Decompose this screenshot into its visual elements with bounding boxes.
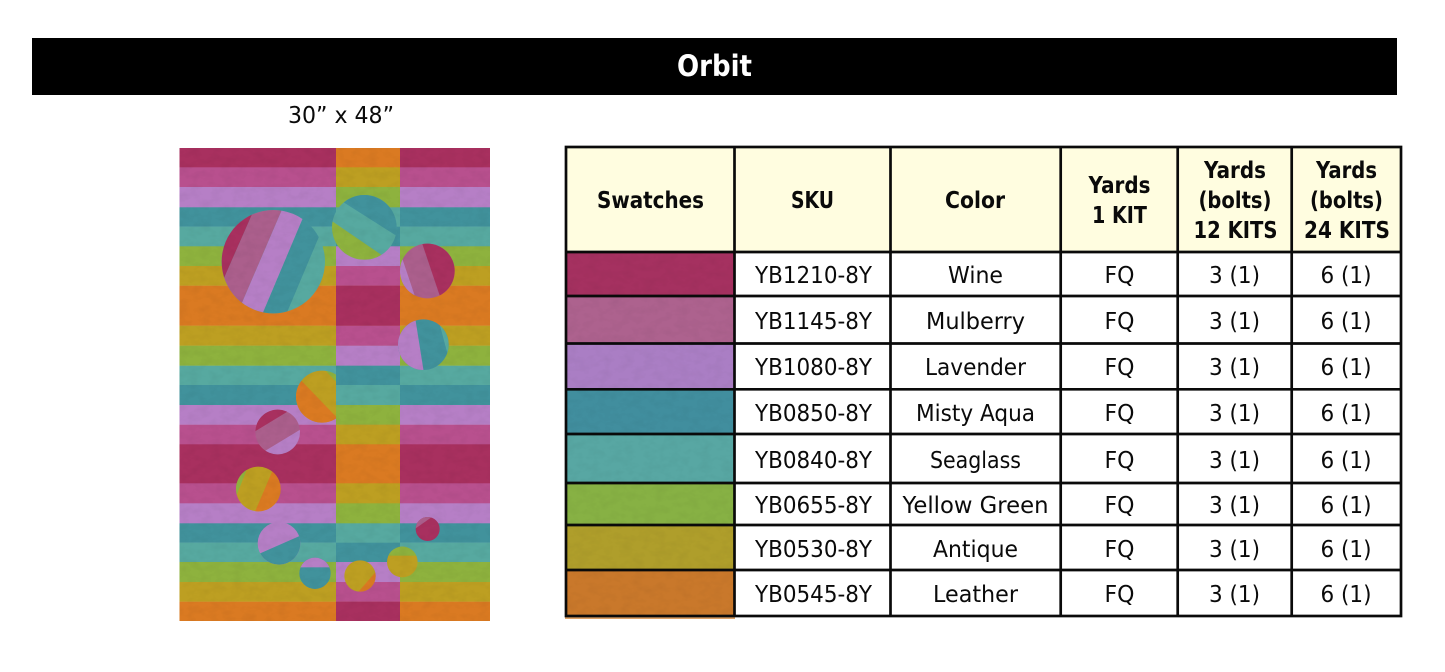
circle: green, antique, leather (236, 466, 281, 512)
row: Seaglass (754, 448, 1372, 474)
table column headings: 1 KIT (1092, 203, 1147, 229)
table column headings: (bolts) (1310, 188, 1383, 214)
circle: small wine and mulberry (416, 517, 440, 541)
row: Antique (754, 537, 1372, 563)
table grid (566, 147, 1401, 616)
row: Leather: Leather (933, 582, 1019, 608)
table column headings: Yards (1088, 173, 1150, 199)
table column headings: Color (945, 188, 1006, 214)
row: Yellow Green: 3 (1) (1209, 493, 1260, 519)
circle: small antique and leather (344, 560, 376, 592)
row: Antique: 3 (1) (1209, 537, 1260, 563)
row: Wine: YB1210-8Y (754, 263, 873, 289)
row: Seaglass: 6 (1) (1320, 448, 1372, 474)
row: Seaglass: Seaglass (930, 448, 1021, 474)
row: Leather: 6 (1) (1320, 582, 1372, 608)
swatches column (565, 252, 735, 619)
row: Leather: YB0545-8Y (754, 582, 873, 608)
circle: large striped (222, 210, 325, 314)
row: Mulberry: YB1145-8Y (754, 309, 873, 335)
row: Yellow Green: Yellow Green (902, 493, 1048, 519)
row: Antique: FQ (1104, 537, 1134, 563)
row: Mulberry: Mulberry (926, 309, 1025, 335)
row: Seaglass: YB0840-8Y (754, 448, 873, 474)
title bar (32, 38, 1397, 95)
row: Wine: FQ (1104, 263, 1134, 289)
row: Yellow Green: YB0655-8Y (754, 493, 873, 519)
row: Wine (754, 263, 1372, 289)
row: Antique: 6 (1) (1320, 537, 1372, 563)
row: Lavender: YB1080-8Y (754, 355, 873, 381)
row: Lavender (754, 355, 1372, 381)
row: Wine: 6 (1) (1320, 263, 1372, 289)
row: Lavender: Lavender (925, 355, 1027, 381)
row: Antique: YB0530-8Y (754, 537, 873, 563)
row: Yellow Green: FQ (1104, 493, 1134, 519)
quilt image (180, 148, 490, 621)
table column headings: Yards (1315, 158, 1377, 184)
circle: leather and antique (296, 370, 336, 423)
lower circles (220, 370, 442, 596)
row: Misty Aqua: 6 (1) (1320, 401, 1372, 427)
row: Leather (754, 582, 1372, 608)
row: Wine: 3 (1) (1209, 263, 1260, 289)
row: Yellow Green: 6 (1) (1320, 493, 1372, 519)
row: Misty Aqua (754, 401, 1372, 427)
circle: lavender and aqua (398, 319, 449, 370)
table column headings: Swatches (597, 188, 704, 214)
kit table (565, 147, 1401, 619)
quilt size label: 30” x 48” (288, 103, 394, 129)
row: Antique: Antique (933, 537, 1018, 563)
circle: small lavender and aqua (299, 558, 331, 589)
table header background (566, 147, 1401, 252)
table column headings: 12 KITS (1194, 218, 1278, 244)
row: Misty Aqua: YB0850-8Y (754, 401, 873, 427)
row: Misty Aqua: Misty Aqua (916, 401, 1035, 427)
row: Lavender: FQ (1104, 355, 1134, 381)
row: Misty Aqua: FQ (1104, 401, 1134, 427)
row: Wine: Wine (948, 263, 1003, 289)
row: Leather: 3 (1) (1209, 582, 1260, 608)
row: Yellow Green (754, 493, 1372, 519)
row: Mulberry: 3 (1) (1209, 309, 1260, 335)
upper circles (222, 195, 455, 370)
row: Seaglass: 3 (1) (1209, 448, 1260, 474)
row: Mulberry (754, 309, 1372, 335)
row: Misty Aqua: 3 (1) (1209, 401, 1260, 427)
table column headings: 24 KITS (1304, 218, 1390, 244)
table column headings: (bolts) (1198, 188, 1272, 214)
circle: small green and antique (387, 546, 418, 578)
row: Lavender: 6 (1) (1320, 355, 1372, 381)
title bar: Orbit (677, 49, 752, 83)
row: Leather: FQ (1104, 582, 1134, 608)
table column headings (597, 158, 1390, 244)
table column headings: SKU (791, 188, 834, 214)
row: Lavender: 3 (1) (1209, 355, 1260, 381)
row: Mulberry: FQ (1104, 309, 1134, 335)
circle: wine and mulberry (400, 244, 455, 298)
row: Seaglass: FQ (1104, 448, 1134, 474)
circle: lavender over aqua (258, 523, 300, 565)
circle: wine, mulberry, lavender (256, 410, 300, 454)
circle: aqua and green (332, 195, 396, 260)
row: Mulberry: 6 (1) (1320, 309, 1372, 335)
table column headings: Yards (1203, 158, 1266, 184)
